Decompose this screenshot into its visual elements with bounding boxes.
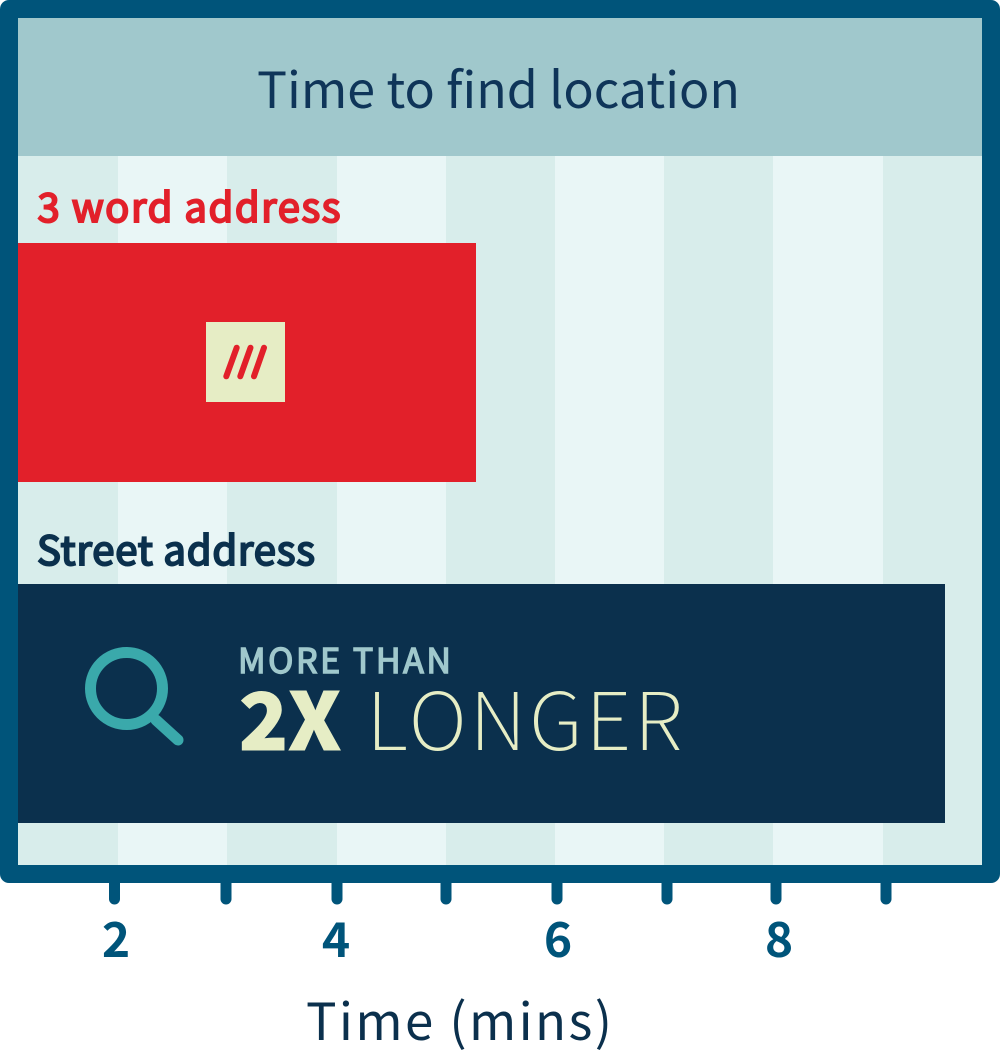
- bar: 3 word address: [18, 243, 476, 482]
- icon: three slashes logo: [206, 322, 285, 402]
- icon: magnifying glass: [90, 652, 178, 740]
- x axis title: Time (mins): [306, 981, 612, 1055]
- x axis ticks: [114, 880, 886, 899]
- header band: [18, 18, 982, 156]
- x axis labels: 2: [102, 901, 130, 971]
- x axis labels: 8: [765, 901, 793, 971]
- x axis labels: 6: [544, 901, 572, 971]
- callout line: more than: MORE THAN: [238, 634, 451, 683]
- title: Time to find location: [257, 51, 740, 123]
- x axis labels: [102, 901, 793, 971]
- callout line: 2x: 2X: [239, 658, 341, 773]
- callout line: longer: LONGER: [366, 658, 683, 774]
- label: street address: Street address: [37, 519, 315, 577]
- label: 3 word address: 3 word address: [38, 176, 340, 234]
- callout: more than 2x longer: [238, 634, 683, 774]
- x axis labels: 4: [322, 901, 350, 971]
- bar: street address: [18, 584, 945, 823]
